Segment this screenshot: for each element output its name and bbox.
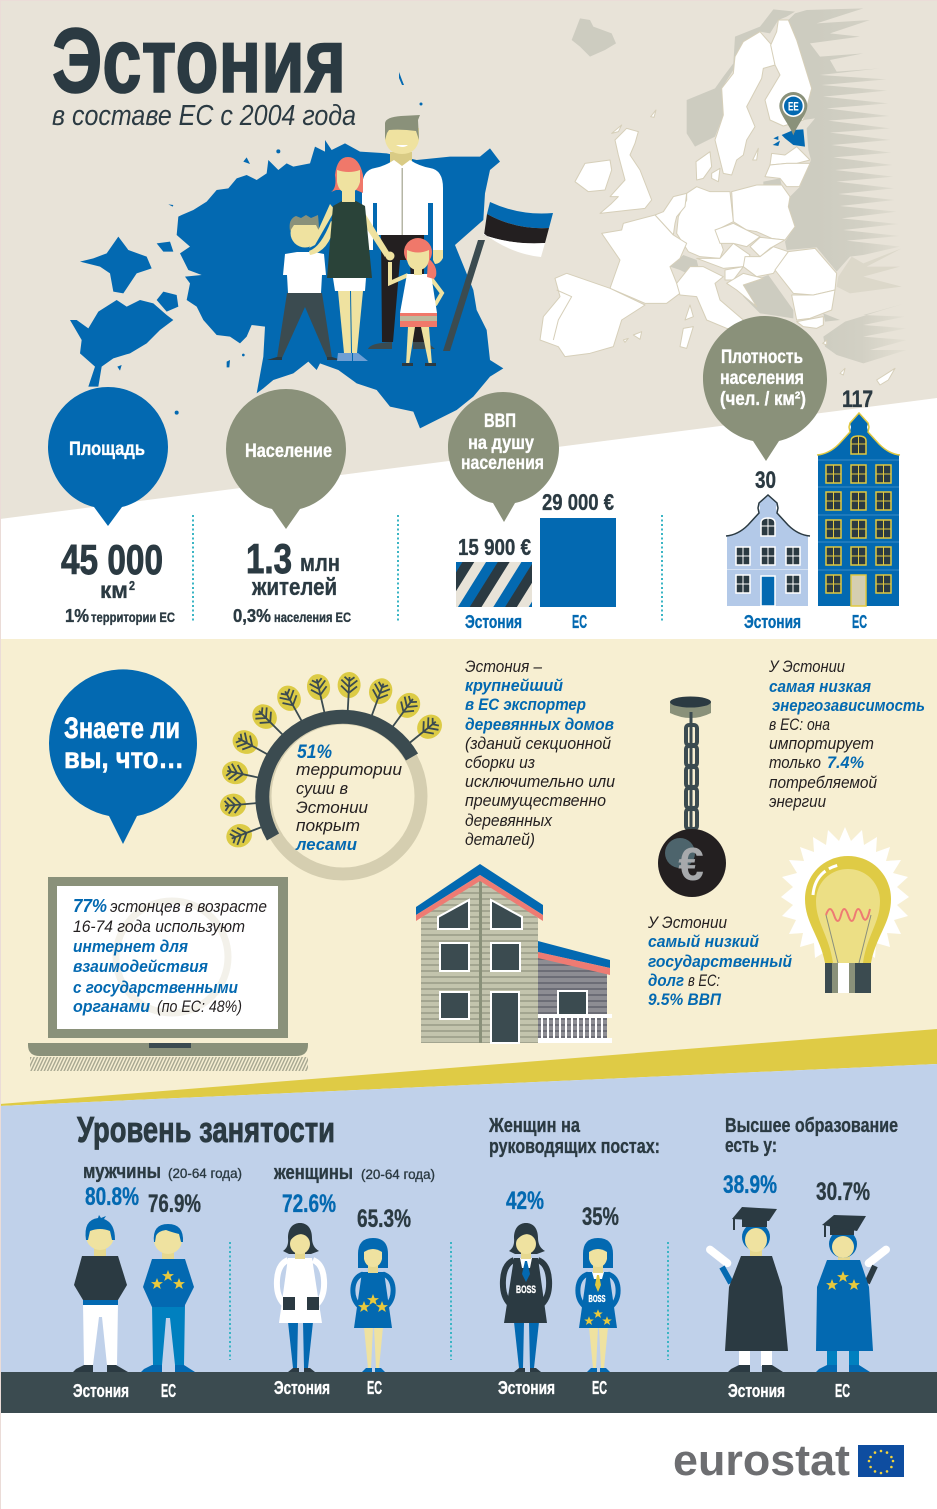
text: energy dependence: импортирует [769,734,874,753]
text: energy dependence: потребляемой [769,773,877,792]
bubble: population density: Плотность [721,347,803,368]
text: wooden houses: (зданий секционной [465,734,611,753]
icon: ball and chain: € [678,838,704,890]
bubble: area [48,387,168,526]
text: internet [73,896,267,1016]
text: wooden houses: деталей) [465,830,535,849]
text: wooden houses: преимущественно [465,791,606,810]
band labels: ЕС [835,1381,850,1401]
heading: women: женщины [273,1162,353,1184]
text: internet: взаимодействия [73,957,208,976]
text: internet: органами [73,997,151,1016]
percentages: 38.9% [723,1171,777,1199]
icon: wooden house [416,864,612,1043]
chart: forest ring: Эстонии [296,798,369,817]
percentages: 42% [506,1187,544,1215]
text: internet: 16-74 года используют [73,917,245,936]
heading: women managers [488,1115,660,1158]
heading: women [273,1162,435,1184]
chart: GDP bars: ЕС [572,612,587,632]
text: energy dependence [768,657,925,811]
title: Эстония [52,10,346,112]
bubble: did you know [49,669,197,844]
stat: area [61,536,175,626]
bubble: did you know: Знаете ли [64,712,180,745]
bubble: population density: населения [720,368,804,389]
band labels: ЕС [161,1381,176,1401]
bubble: GDP per capita: населения [461,453,544,474]
bubble: area: Площадь [69,439,145,460]
map: Estonia highlighted [773,129,805,147]
flag: Estonia [443,202,553,351]
band labels: Эстония [498,1378,555,1398]
percentages: 30.7% [816,1178,870,1206]
chart: density houses: 117 [842,386,873,413]
chart: forest ring: покрыт [296,816,360,835]
text: internet: интернет для [73,937,188,956]
heading: men: мужчины [83,1161,161,1183]
text: internet: с государственными [73,978,239,997]
stat: area: 1% [65,606,89,626]
bubble: population: Население [245,441,332,462]
icon: map pin EE: EE [788,99,799,113]
text: wooden houses: в ЕС экспортер [465,695,586,714]
text: wooden houses: Эстония – [465,657,542,676]
figure: woman manager Estonia [503,1223,549,1372]
chart: forest ring [219,671,447,874]
stat: population: 1.3 [246,535,292,582]
figure: graduate EU [816,1215,892,1372]
text: public debt: государственный [648,952,793,971]
text: public debt: У Эстонии [647,913,727,932]
bubble: GDP per capita [448,392,559,522]
text: energy dependence: в ЕС: она [769,715,830,734]
map: Europe [540,8,907,385]
chart: forest ring: лесами [295,835,358,854]
band labels [73,1378,850,1401]
icon: trees [219,671,447,851]
icon: EU house [817,413,900,606]
text: energy dependence: энергии [769,792,826,811]
figure: woman EU [353,1238,393,1372]
chart: forest ring: 51% [297,742,332,763]
text: public debt: самый низкий [648,932,760,951]
band labels: Эстония [274,1378,330,1398]
map: EU countries [540,20,895,385]
icon: light bulb [781,827,909,993]
heading: higher education: Высшее образование [725,1115,898,1137]
bubble: did you know: вы, что… [64,742,184,775]
icon: EU flag [858,1445,904,1477]
stat: area: территории ЕС [91,609,175,625]
figure: woman Estonia [277,1223,324,1372]
chart: GDP bars [456,489,616,632]
bubble: GDP per capita: ВВП [484,411,516,432]
text: public debt [647,913,793,1009]
map: non-EU regions [572,8,907,363]
stat: population: жителей [251,574,337,601]
text: internet: эстонцев в возрасте [110,897,267,916]
icon: ball and chain [658,696,726,897]
heading: higher education: есть у: [725,1135,777,1157]
map: Estonia large [70,140,503,428]
text: internet: 77% [73,896,107,916]
subtitle: в составе ЕС с 2004 года [52,100,356,132]
panel: employment background [0,1064,937,1372]
text: energy dependence: У Эстонии [768,657,845,676]
stat: area: 2 [129,578,135,593]
figure: woman manager EU: BOSS [588,1294,606,1305]
text: wooden houses: деревянных домов [465,715,614,734]
dividers [193,515,662,623]
figure: graduate Estonia [704,1207,788,1372]
text: energy dependence: только [769,753,821,772]
text: energy dependence: самая низкая [769,677,871,696]
heading: women: (20-64 года) [361,1166,435,1182]
stat: population: населения ЕС [274,609,351,625]
islets north [399,72,422,106]
band labels: ЕС [367,1378,382,1398]
chart: GDP bars: Эстония [465,612,522,632]
chart: GDP bars: 15 900 € [458,534,531,560]
percentages: 72.6% [282,1190,336,1218]
bubble: GDP per capita: на душу [468,433,534,454]
percentages: 65.3% [357,1205,411,1233]
girl [390,238,442,366]
heading: women managers: руководящих постах: [489,1136,660,1158]
logo: eurostat: eurostat [673,1436,850,1485]
mother [309,157,394,361]
figure: man EU [141,1224,195,1372]
percentages [85,1171,870,1233]
chart: density houses: Эстония [744,612,801,632]
gold band [0,1029,937,1106]
chart: forest ring: территории [296,760,403,779]
stat: population: 0,3% [233,606,271,626]
band labels: ЕС [592,1378,607,1398]
text: public debt: 9.5% ВВП [648,990,722,1009]
bubble: population density: (чел. / км²) [720,389,806,410]
text: wooden houses [465,657,616,849]
heading: men [83,1161,242,1183]
text: wooden houses: крупнейший [465,676,564,695]
percentages: 80.8% [85,1183,139,1211]
band labels: Эстония [73,1381,129,1401]
text: wooden houses: исключительно или [465,772,616,791]
figure: woman manager Estonia: BOSS [516,1284,536,1296]
boy [267,215,342,360]
text: public debt: долг [648,971,684,990]
bubble: population density [703,316,827,461]
chart: GDP bars: 29 000 € [542,489,614,515]
percentages: 76.9% [148,1190,201,1218]
father [362,115,443,349]
band labels: Эстония [728,1381,785,1401]
dividers [230,1242,668,1360]
background: beige map area [0,0,937,519]
text: internet: (по ЕС: 48%) [157,997,242,1016]
heading: higher education [725,1115,898,1157]
text: wooden houses: деревянных [465,811,552,830]
text: energy dependence: 7.4% [827,753,864,772]
stat: area: 45 000 [61,536,163,583]
bubble: population [226,389,346,529]
chart: forest ring: суши в [296,779,348,798]
figure: woman manager EU [578,1238,618,1372]
chart: density houses: 30 [755,467,776,494]
text: public debt: в ЕС: [688,971,720,990]
chart: density houses: ЕС [852,612,867,632]
stat: area: км [100,577,128,603]
text: wooden houses: сборки из [465,753,535,772]
dark ground band [0,1372,937,1413]
panel: did you know background [0,639,937,1105]
icon: laptop with text [28,877,308,1071]
heading: women managers: Женщин на [488,1115,581,1137]
stat: population [233,535,351,626]
chart: density houses [726,386,900,632]
icon: Estonia house [726,495,810,606]
stat: population: млн [300,550,340,577]
family illustration [267,115,553,366]
heading: employment: Уровень занятости [77,1109,335,1150]
heading: men: (20-64 года) [168,1165,242,1181]
percentages: 35% [582,1203,619,1231]
figure: man Estonia [73,1215,128,1372]
icon: map pin EE [779,92,807,135]
